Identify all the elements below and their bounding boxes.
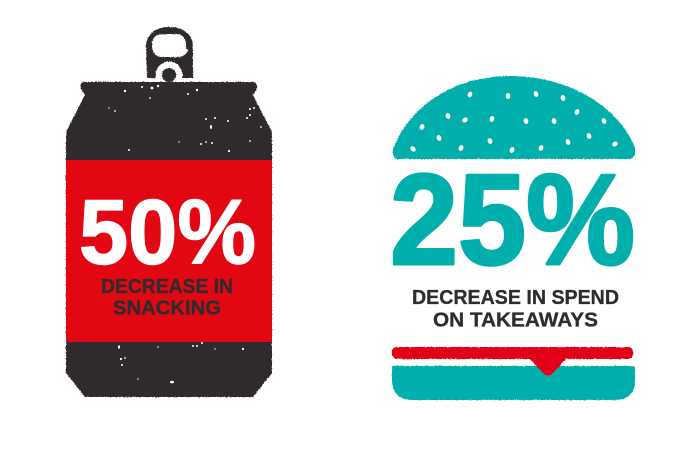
can with 50% statistic bbox=[66, 27, 272, 397]
icon: bottom bun bbox=[392, 366, 635, 400]
burger with 25% statistic bbox=[390, 76, 635, 400]
caption: decrease in snacking: SNACKING bbox=[113, 296, 221, 320]
sesame seeds bbox=[409, 90, 619, 154]
caption: decrease in spend on takeaways bbox=[412, 286, 619, 332]
icon: red filling bbox=[392, 347, 633, 376]
50% figure: 50% bbox=[79, 182, 256, 284]
red label band bbox=[66, 160, 272, 342]
caption: decrease in snacking bbox=[101, 275, 233, 320]
caption: decrease in spend on takeaways: ON TAKEAWAYS bbox=[433, 308, 598, 332]
caption: decrease in snacking: DECREASE IN bbox=[101, 275, 233, 298]
caption: decrease in spend on takeaways: DECREASE IN SPEND bbox=[412, 286, 619, 309]
icon: top bun bbox=[393, 76, 635, 159]
25% figure: 25% bbox=[390, 148, 635, 292]
icon: ring pull bbox=[146, 27, 193, 88]
can speckles bbox=[108, 85, 262, 383]
can body bbox=[66, 82, 272, 397]
